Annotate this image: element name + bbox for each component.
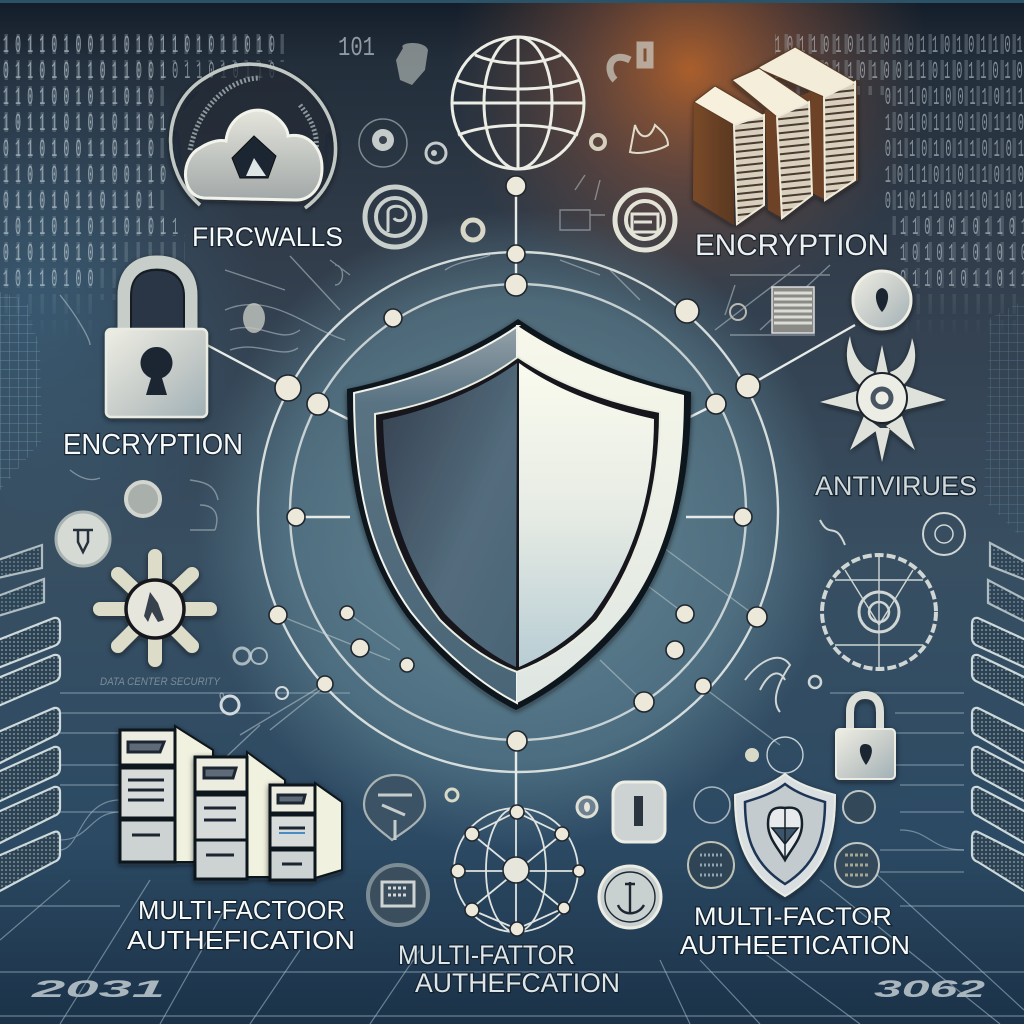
binary code column left: 1 0 1 1 1 0 1 0 1 0 1 1 0 1 <box>3 110 166 138</box>
binary code column left: 1 1 0 1 0 1 1 0 1 0 0 1 1 0 <box>3 162 166 190</box>
label: multi-factor authentication right <box>680 903 910 960</box>
icon: ghost circles around small shield <box>688 737 879 888</box>
binary code column left: 0 1 1 0 1 0 1 1 0 1 1 0 1 <box>3 188 154 216</box>
ghost doodles mid left <box>220 648 320 758</box>
label: firewalls: FIRCWALLS <box>192 222 343 252</box>
connector nodes <box>269 176 767 751</box>
label: multi-factor authentication left: AUTHEFICATION <box>127 925 355 955</box>
icon: network globe <box>451 805 585 936</box>
binary code column right: 1 0 1 1 0 1 0 1 1 0 1 0 <box>885 162 1024 190</box>
icon: small padlock <box>836 695 895 779</box>
binary code column left: 0 1 1 0 1 0 0 1 1 0 1 1 0 <box>3 136 154 164</box>
binary code column right: 0 1 1 0 1 0 1 1 0 1 1 <box>900 266 1024 294</box>
binary code column right: 0 1 1 0 1 0 0 1 1 0 1 1 <box>885 84 1024 112</box>
icon: ornate ghost gear <box>745 513 965 712</box>
label: year left: 2031 <box>30 976 165 1003</box>
binary code column right: 1 0 1 0 1 1 0 1 0 1 0 <box>900 240 1024 268</box>
label: multi-factor authentication centre <box>398 940 620 998</box>
binary code column right: 1 0 1 1 0 1 0 1 1 0 1 0 1 1 0 1 0 1 1 0 1 <box>775 32 1023 60</box>
right server slats <box>972 543 1024 892</box>
binary code column left <box>3 32 275 294</box>
label: encryption left: ENCRYPTION <box>63 429 243 461</box>
label: encryption right: ENCRYPTION <box>695 229 889 262</box>
binary code column left: 0 1 1 0 1 0 1 1 0 1 1 0 0 1 0 1 1 0 1 0 1 1 0 <box>3 58 275 86</box>
server stack 1 <box>120 726 213 862</box>
server stack 2 <box>195 752 285 879</box>
binary smears <box>4 34 1016 314</box>
icon: cloud firewall <box>171 64 336 208</box>
icon: small shield <box>735 774 835 896</box>
label: multi-factor authentication centre: AUTHEFCATION <box>415 968 620 998</box>
ghost doodles upper <box>60 43 668 352</box>
binary code column left: 1 0 1 1 0 1 0 0 1 1 0 1 0 1 1 0 1 0 1 1 0 1 0 <box>3 32 275 60</box>
icon: document ring <box>615 190 675 250</box>
connector rings around the shield <box>207 186 855 812</box>
label: year right: 3062 <box>874 976 986 1003</box>
label: multi-factor authentication left: MULTI-FACTOOR <box>138 895 345 925</box>
server stack 3 <box>270 783 342 880</box>
binary code column left: 1 0 1 1 0 1 0 0 <box>3 266 94 294</box>
floor grid and horizontal lines <box>0 693 1024 1024</box>
icon: key circle <box>853 271 911 329</box>
icon: ghost circles lower left <box>364 775 458 925</box>
binary code column left: 0 1 0 1 1 0 1 0 1 1 <box>3 240 118 268</box>
icon: large padlock <box>106 262 207 417</box>
central shield <box>347 319 691 710</box>
label: multi-factor authentication right: MULTI-FACTOR <box>694 903 892 931</box>
label: antivirus: ANTIVIRUES <box>815 471 977 501</box>
left server slats <box>0 545 60 892</box>
icon: small rings left <box>56 470 218 566</box>
icon: rounded device <box>577 782 665 842</box>
binary code column right: 0 1 0 1 1 0 1 1 0 1 0 1 <box>885 188 1024 216</box>
icon: anchor ring <box>599 866 661 928</box>
binary code column left: 1 1 0 1 0 0 1 0 1 1 0 1 0 <box>3 84 154 112</box>
label: multi-factor authentication right: AUTHEETICATION <box>680 930 910 960</box>
icon: globe <box>452 37 584 169</box>
label: multi-factor authentication left <box>127 895 355 955</box>
icon: eye ghost circle <box>359 119 483 240</box>
icon: gear <box>100 556 210 660</box>
ghost buildings at the sides <box>0 292 1024 540</box>
icon: server towers <box>693 47 858 225</box>
label: 101: 101 <box>338 34 375 64</box>
icon: antivirus star <box>820 336 946 462</box>
ghost device panel <box>715 265 830 335</box>
label: faded caption: DATA CENTER SECURITY <box>100 676 221 688</box>
binary code column left: 1 0 1 1 0 1 1 0 1 1 0 1 0 1 1 <box>3 214 178 242</box>
binary code column right: 1 1 0 1 0 1 1 0 1 0 0 1 1 0 1 0 1 1 0 1 0 <box>775 58 1023 86</box>
binary code column right: 0 1 1 0 1 0 1 1 0 1 0 1 <box>885 136 1024 164</box>
binary code column right: 1 1 0 1 0 1 0 1 1 0 1 <box>900 214 1024 242</box>
binary code column right: 1 0 1 0 1 1 0 1 0 1 1 0 <box>885 110 1024 138</box>
label: multi-factor authentication centre: MULTI-FATTOR <box>398 940 575 970</box>
binary code column right <box>775 32 1024 294</box>
icon: at-sign ring <box>365 187 425 247</box>
